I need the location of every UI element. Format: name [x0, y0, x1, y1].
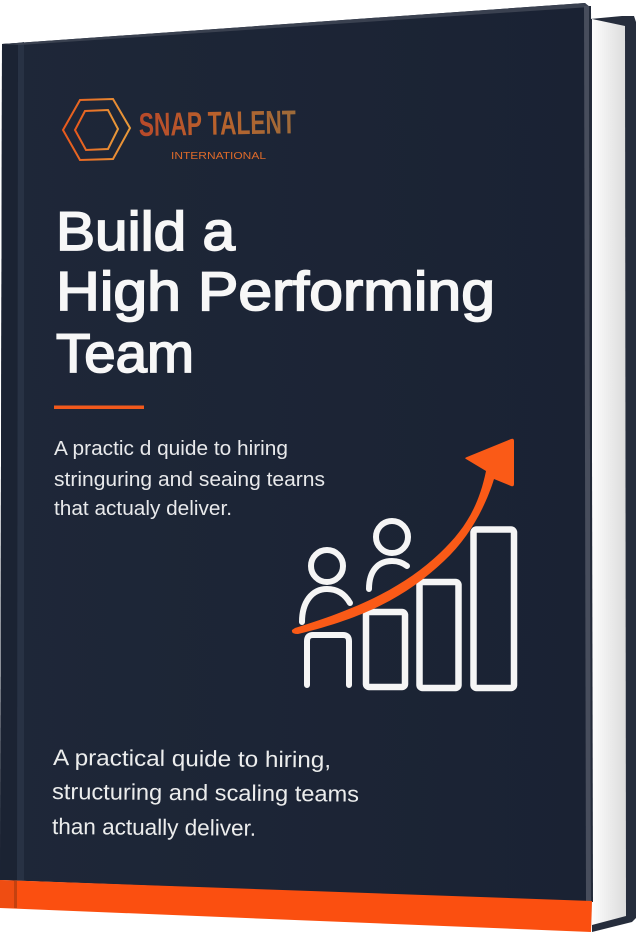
subtitle text block: that actualy deliver. [54, 498, 232, 520]
back cover edge [590, 16, 636, 932]
title [56, 200, 495, 384]
icon: second person [369, 521, 408, 589]
lower description text block [52, 745, 359, 841]
lower description text block: A practical quide to hiring, [53, 745, 331, 772]
icon: hexagon logo mark [63, 99, 130, 160]
page block [592, 19, 626, 925]
arrow: growth curve [292, 439, 514, 634]
subtitle text block [54, 438, 325, 520]
orange bottom band [0, 880, 592, 932]
logo: Snap Talent International [63, 99, 296, 162]
orange divider rule [54, 406, 144, 409]
title: Team [56, 322, 194, 384]
logo subtitle: INTERNATIONAL [171, 150, 266, 162]
icon: first person [302, 550, 350, 685]
title: Build a [56, 200, 235, 262]
bars [366, 530, 514, 688]
lower description text block: structuring and scaling teams [52, 779, 359, 807]
chart: people, rising bars and arrow [292, 439, 514, 688]
subtitle text block: stringuring and seaing tearns [54, 469, 325, 491]
lower description text block: than actually deliver. [52, 814, 256, 841]
subtitle text block: A practic d quide to hiring [54, 438, 288, 460]
logo wordmark: SNAP TALENT [138, 103, 296, 143]
title: High Performing [56, 260, 495, 322]
